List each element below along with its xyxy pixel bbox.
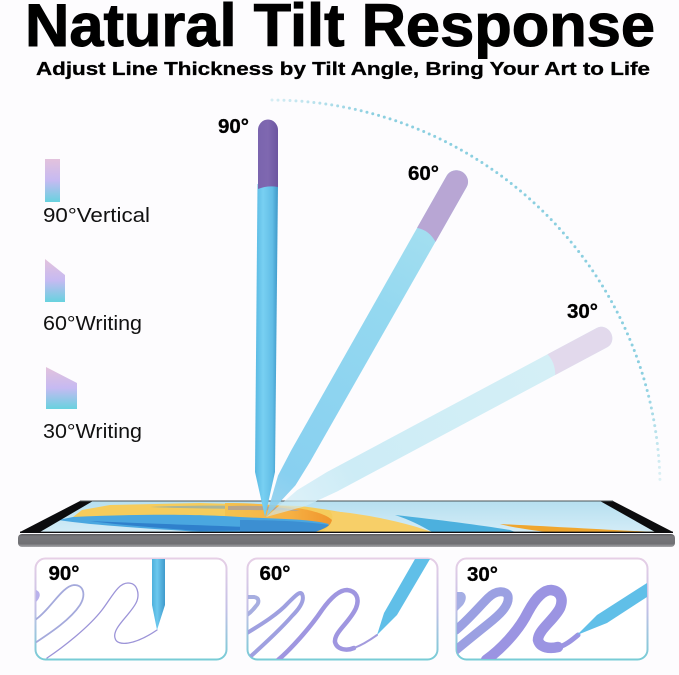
legend item: 60 degree writing	[43, 259, 142, 335]
angle label 90: 90°	[218, 115, 249, 138]
tablet screen lower edge	[20, 531, 673, 533]
pen tip	[377, 559, 430, 635]
angle label 60: 60°	[408, 162, 439, 185]
legend: angle types	[43, 159, 150, 443]
card: 60 degree medium line	[247, 558, 438, 660]
medium strokes	[247, 590, 377, 660]
card: 90 degree thin line	[35, 558, 226, 660]
subtitle: Adjust Line Thickness by Tilt Angle, Bring Your Art to Life	[36, 59, 650, 79]
thin strokes	[35, 583, 157, 658]
card frame	[248, 558, 438, 660]
tablet top edge	[80, 500, 613, 502]
legend item: 60 degree writing: 60°Writing	[43, 313, 142, 335]
thick strokes	[456, 590, 578, 660]
legend item: 30 degree writing: 30°Writing	[43, 421, 142, 443]
tablet	[18, 501, 675, 547]
pen at 30 degrees	[261, 323, 616, 527]
card frame	[36, 558, 226, 660]
card label: 60°	[260, 562, 291, 585]
legend item: 30 degree writing	[43, 367, 142, 443]
pen tip	[152, 559, 165, 630]
card: 30 degree thick line	[456, 558, 648, 660]
pen at 60 degrees	[256, 166, 472, 523]
card frame	[456, 558, 648, 660]
legend item: 90 degree vertical: 90°Vertical	[43, 205, 150, 227]
dotted angle arc	[272, 100, 660, 482]
card label: 30°	[467, 563, 498, 586]
tablet body edge	[18, 534, 675, 547]
pen tip	[577, 583, 647, 635]
angle label 30: 30°	[567, 300, 598, 323]
tablet right bezel	[600, 501, 673, 532]
card label: 90°	[48, 562, 80, 585]
tablet left bezel	[20, 501, 93, 532]
tablet screen	[30, 501, 660, 532]
pen at 90 degrees	[255, 120, 278, 517]
legend item: 90 degree vertical	[43, 159, 150, 227]
